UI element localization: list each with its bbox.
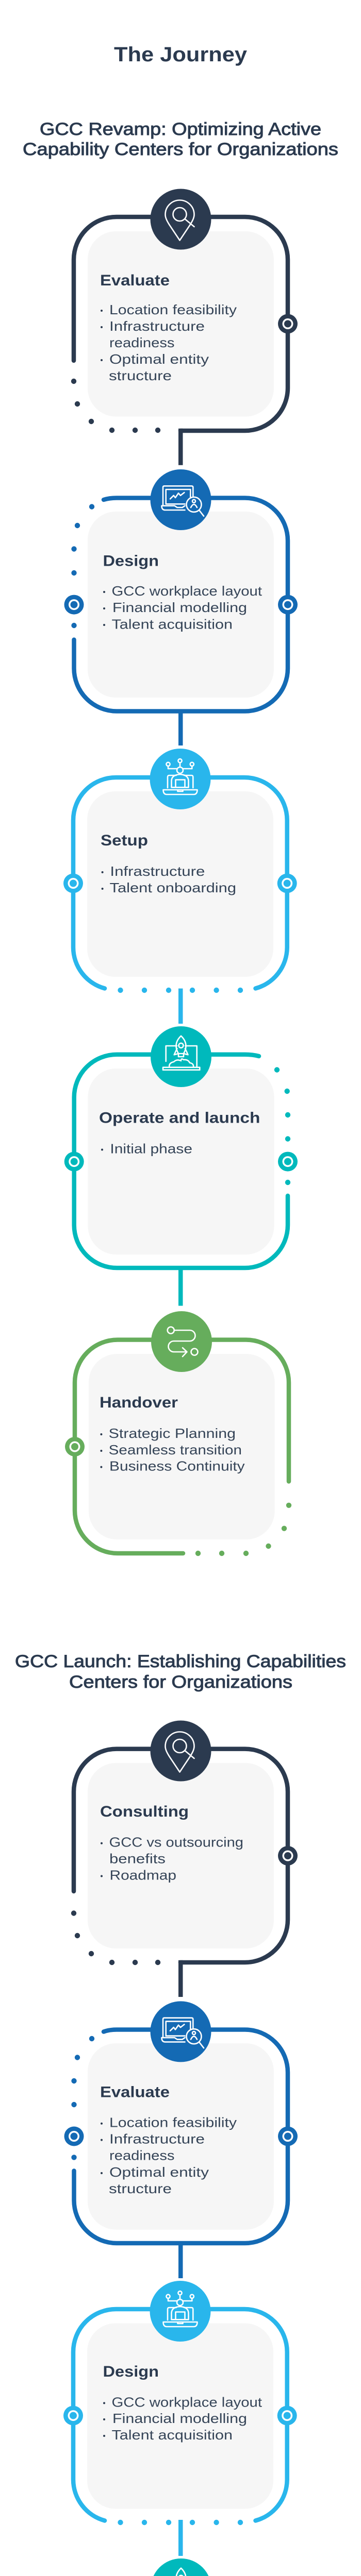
- panel: Design: GCC workplace layout: [111, 583, 262, 599]
- panel: Design: Talent acquisition: [111, 616, 233, 632]
- heading: GCC Launch: [15, 1652, 346, 1692]
- panel: Setup (launch): [64, 2558, 298, 2576]
- panel: Operate and launch: [64, 1026, 298, 1306]
- panel: Evaluate (launch): Infrastructure: [109, 2131, 205, 2147]
- panel: Evaluate (launch): Optimal entity: [109, 2164, 209, 2180]
- panel: Evaluate: Location feasibility: [109, 302, 237, 317]
- icon: location search: [165, 200, 194, 240]
- panel: Evaluate: Evaluate: [100, 272, 170, 289]
- panel: Evaluate (launch): structure: [109, 2181, 172, 2196]
- panel: Handover: Strategic Planning: [109, 1426, 236, 1441]
- panel: Evaluate: [71, 189, 298, 465]
- panel: Operate and launch: Initial phase: [110, 1141, 192, 1156]
- icon: rocket launch: [163, 2568, 200, 2576]
- panel: Setup: Setup: [101, 832, 148, 849]
- title: The Journey: [114, 43, 248, 66]
- panel: Setup: [63, 749, 297, 1024]
- panel: Evaluate (launch): Evaluate: [100, 2084, 170, 2101]
- panel: Setup: Talent onboarding: [109, 880, 236, 895]
- panel: Setup: Infrastructure: [110, 863, 205, 879]
- panel: Evaluate: structure: [109, 368, 172, 383]
- panel: Design (launch): [63, 2281, 297, 2556]
- heading: GCC Launch: Centers for Organizations: [69, 1672, 292, 1692]
- panel: Consulting: Consulting: [100, 1803, 189, 1820]
- heading: GCC Revamp: GCC Revamp: Optimizing Active: [40, 120, 321, 139]
- panel: Consulting: [71, 1721, 298, 1997]
- panel: Handover: Handover: [100, 1394, 178, 1411]
- panel: Evaluate: readiness: [109, 335, 174, 350]
- icon: laptop analysis: [162, 2018, 204, 2048]
- heading: GCC Revamp: [23, 120, 338, 159]
- heading: GCC Revamp: Capability Centers for Organizations: [23, 140, 338, 159]
- panel: Consulting: Roadmap: [109, 1867, 176, 1883]
- panel: Design (launch): Talent acquisition: [111, 2427, 233, 2443]
- panel: Design (launch): GCC workplace layout: [111, 2394, 262, 2410]
- icon: laptop analysis: [162, 486, 204, 516]
- icon: person at laptop network: [163, 2291, 197, 2327]
- panel: Design: [64, 469, 298, 745]
- panel: Design: Design: [103, 552, 159, 570]
- panel: Operate and launch: Operate and launch: [99, 1110, 260, 1127]
- panel: Handover: Business Continuity: [109, 1458, 245, 1473]
- panel: Evaluate (launch): Location feasibility: [109, 2115, 237, 2130]
- icon: location search: [165, 1732, 194, 1772]
- panel: Design (launch): Financial modelling: [112, 2411, 247, 2426]
- panel: Handover: Seamless transition: [109, 1442, 242, 1458]
- panel: Handover: [65, 1311, 291, 1556]
- icon: rocket launch: [163, 1036, 200, 1070]
- panel: Evaluate: Infrastructure: [109, 318, 205, 334]
- panel: Evaluate (launch): [64, 2001, 298, 2278]
- panel: Consulting: benefits: [109, 1851, 166, 1867]
- heading: GCC Launch: GCC Launch: Establishing Capabilities: [15, 1652, 346, 1671]
- icon: person at laptop network: [163, 759, 197, 794]
- icon: route: [168, 1327, 198, 1357]
- panel: Evaluate: Optimal entity: [109, 351, 209, 367]
- panel: Consulting: GCC vs outsourcing: [109, 1835, 243, 1850]
- panel: Design: Financial modelling: [112, 600, 247, 615]
- panel: Design (launch): Design: [103, 2363, 159, 2380]
- panel: Evaluate (launch): readiness: [109, 2147, 174, 2163]
